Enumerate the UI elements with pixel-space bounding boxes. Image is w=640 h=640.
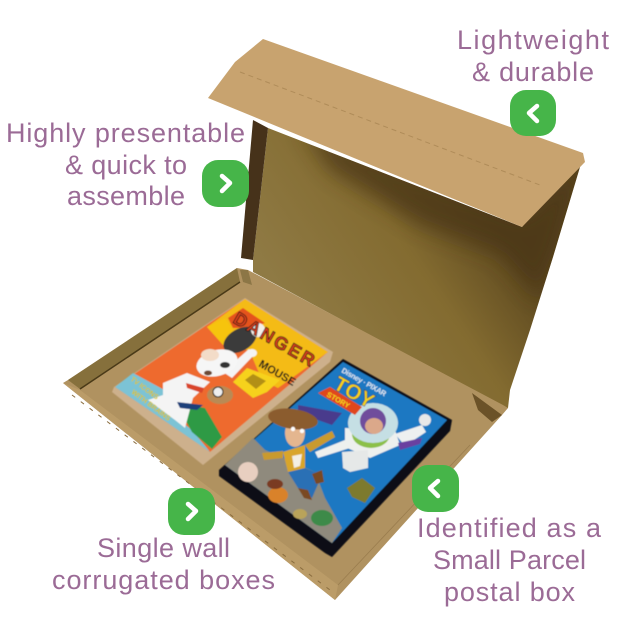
black case [219,359,452,557]
Story red banner [318,387,362,415]
Disney Pixar logo: Disney · PIXAR [340,366,388,399]
green toy bucket [347,478,375,503]
label: lightweight and durable: Lightweight [457,25,609,55]
light blue band [115,373,210,452]
label: identified as a small parcel postal box: Identified as a [417,513,602,543]
front edge strip [63,383,338,600]
title blocks: MOUSE [257,358,298,389]
clear case [112,298,333,465]
label: single wall corrugated boxes: Single wall [97,533,230,563]
label: lightweight and durable: & durable [472,57,594,87]
label: single wall corrugated boxes [52,533,275,595]
Danger Mouse DVD [112,298,333,465]
box lid interior [253,128,583,408]
Danger Mouse DVD: WITH BRAINS [130,389,172,423]
label: highly presentable and quick to assemble: Highly presentable [6,118,245,148]
rear left inner wall [68,268,240,389]
label: lightweight and durable [457,25,609,87]
dark right corner notch [472,393,502,422]
label: highly presentable and quick to assemble [6,118,245,211]
hinge notch [240,270,252,285]
yellow top panel [207,299,328,388]
button: right chevron, left side [202,160,249,207]
button: left chevron, top right [510,90,556,136]
blue band caption: TV ICONS [129,376,160,402]
Toy Story title: TOY [330,372,378,413]
label: identified as a small parcel postal box: Small Parcel [433,545,586,575]
purple streak [298,405,342,425]
Toy Story title: STORY [325,390,352,410]
label: single wall corrugated boxes: corrugated boxes [52,565,275,595]
cover sky [225,362,447,543]
title blocks: DANGER [230,308,318,370]
button: right chevron, bottom left [168,488,215,535]
green hill [176,403,222,449]
ground and characters [225,438,342,543]
label: identified as a small parcel postal box [417,513,602,607]
Toy Story DVD [219,359,452,557]
lid left side strip [241,120,268,260]
cover art background [115,299,328,452]
yellow starburst [233,368,280,398]
white mouse character [148,345,257,428]
label: highly presentable and quick to assemble: & quick to [65,150,187,180]
box base outer [63,268,508,600]
lid shadow under flap [300,141,580,300]
lid closing flap [208,39,585,227]
Woody [262,406,335,500]
button: left chevron, bottom right [412,465,459,512]
cardboard box [63,39,590,600]
title blocks [207,308,318,389]
label: highly presentable and quick to assemble: assemble [67,181,185,211]
Buzz Lightyear [315,403,431,472]
label: identified as a small parcel postal box: postal box [444,577,576,607]
